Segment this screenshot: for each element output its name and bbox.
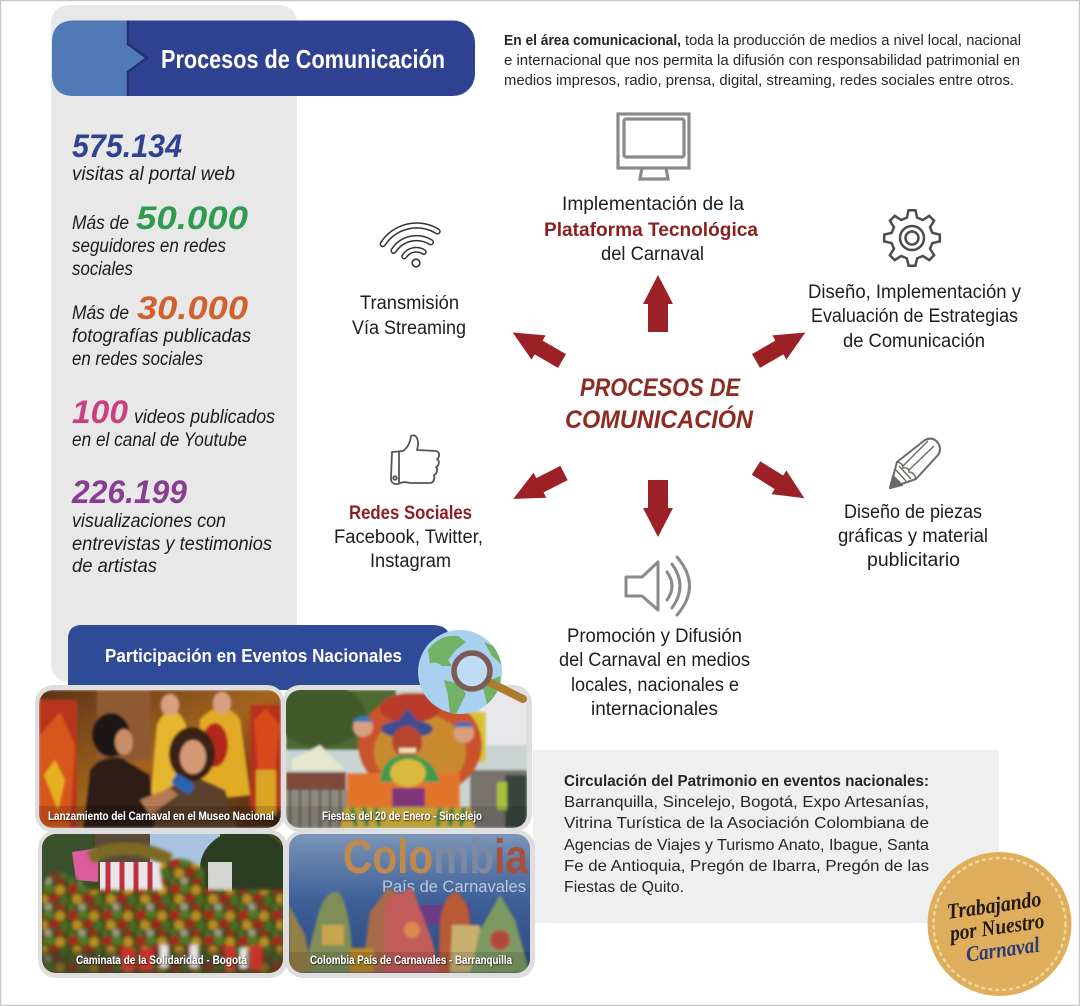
text: piezas gráficas: Diseño de piezas <box>844 502 982 523</box>
heading: Procesos de Comunicación: Procesos de Comunicación <box>161 44 445 74</box>
text: promoción y difusión: del Carnaval en medios <box>559 650 750 671</box>
photo: barranquilla: País de Carnavales <box>382 877 526 896</box>
text: promoción y difusión: Promoción y Difusión <box>567 626 742 647</box>
arrow: down <box>643 480 673 537</box>
central title: COMUNICACIÓN <box>565 405 754 434</box>
stat: published photos: fotografías publicadas <box>72 326 251 347</box>
stat: social followers: Más de <box>72 213 129 234</box>
stat: interview views: de artistas <box>72 556 157 577</box>
text block: introduction: e internacional que nos permita la difusión con responsabilidad patrimonial en <box>504 53 1020 69</box>
stat: social followers: seguidores en redes <box>72 236 226 257</box>
heading: Participación en Eventos Nacionales: Participación en Eventos Nacionales <box>105 645 402 666</box>
text: promoción y difusión: internacionales <box>591 699 718 720</box>
text: plataforma tecnológica: del Carnaval <box>601 244 704 265</box>
badge: trabajando por nuestro carnaval: Trabajando <box>945 886 1043 924</box>
photo: bogotá <box>42 830 290 973</box>
stat: published photos: en redes sociales <box>72 349 203 370</box>
caption: barranquilla: Colombia País de Carnavales - Barranquilla <box>310 955 513 967</box>
icon: thumbs up <box>391 435 439 484</box>
text block: introduction: medios impresos, radio, prensa, digital, streaming, redes sociales entre otros. <box>504 73 1014 89</box>
panel: photo grid <box>35 683 535 978</box>
badge: trabajando por nuestro carnaval: por Nuestro <box>947 908 1046 946</box>
caption: bogotá: Caminata de la Solidaridad - Bogotá <box>76 955 248 967</box>
stat: youtube videos: en el canal de Youtube <box>72 430 247 451</box>
text: estrategias de comunicación: Evaluación de Estrategias <box>811 306 1018 327</box>
text: estrategias de comunicación <box>808 282 1021 352</box>
central title <box>565 374 754 434</box>
stat: interview views <box>71 474 272 577</box>
icon: globe with magnifying glass <box>418 630 523 714</box>
text: plataforma tecnológica: Implementación de la <box>562 194 744 215</box>
caption: sincelejo: Fiestas del 20 de Enero - Sincelejo <box>322 811 482 823</box>
stat: portal visits: visitas al portal web <box>72 164 235 185</box>
caption: museo nacional: Lanzamiento del Carnaval en el Museo Nacional <box>48 811 274 823</box>
stat: published photos <box>72 290 251 370</box>
text: transmisión: Transmisión <box>360 293 459 314</box>
stat: published photos: 30.000 <box>137 290 248 326</box>
text: plataforma tecnológica <box>544 194 758 265</box>
arrow: up <box>643 275 673 332</box>
panel: statistics sidebar <box>51 5 297 682</box>
panel: circulación del patrimonio: Agencias de Viajes y Turismo Anato, Ibague, Santa <box>564 837 929 854</box>
photo: barranquilla <box>289 831 530 973</box>
stat: youtube videos: 100 <box>72 394 128 430</box>
stat: interview views: visualizaciones con <box>72 511 226 532</box>
text: redes sociales <box>334 503 483 572</box>
text: promoción y difusión: locales, nacionales e <box>571 675 739 696</box>
photo: barranquilla: Colombia <box>343 831 528 884</box>
text: promoción y difusión <box>559 626 750 720</box>
photo: museo nacional <box>39 690 281 828</box>
stat: youtube videos: videos publicados <box>134 407 275 428</box>
photo: sincelejo <box>275 683 527 828</box>
stat: published photos: Más de <box>72 303 129 324</box>
text: redes sociales: Redes Sociales <box>349 503 472 524</box>
text: piezas gráficas <box>838 502 988 571</box>
icon: monitor <box>618 114 689 179</box>
panel: circulación del patrimonio: Vitrina Turística de la Asociación Colombiana de <box>564 815 929 832</box>
panel: circulación del patrimonio: Barranquilla, Sincelejo, Bogotá, Expo Artesanías, <box>564 794 929 811</box>
stat: social followers <box>72 200 248 280</box>
icon: speaker <box>626 557 690 615</box>
stat: youtube videos <box>72 394 275 451</box>
stat: interview views: entrevistas y testimonios <box>72 534 272 555</box>
icon: pencil <box>890 439 940 488</box>
text: transmisión: Vía Streaming <box>352 318 466 339</box>
panel: circulación del patrimonio <box>533 750 999 923</box>
badge: trabajando por nuestro carnaval: Carnaval <box>964 932 1042 967</box>
heading: Procesos de Comunicación <box>52 20 475 96</box>
arrow: up left <box>506 320 569 373</box>
stat: interview views: 226.199 <box>71 474 187 510</box>
panel: circulación del patrimonio: Circulación del Patrimonio en eventos nacionales: <box>564 773 929 790</box>
text block: introduction <box>504 33 1021 89</box>
stat: portal visits: 575.134 <box>72 128 182 164</box>
text: plataforma tecnológica: Plataforma Tecnológica <box>544 220 758 241</box>
central title: PROCESOS DE <box>580 374 741 402</box>
text: piezas gráficas: gráficas y material <box>838 526 988 547</box>
text: estrategias de comunicación: Diseño, Implementación y <box>808 282 1021 303</box>
text: estrategias de comunicación: de Comunicación <box>843 331 985 352</box>
stat: social followers: 50.000 <box>136 200 248 236</box>
stat: portal visits <box>72 128 235 185</box>
panel: circulación del patrimonio: Fiestas de Quito. <box>564 879 684 896</box>
text block: introduction: toda la producción de medios a nivel local, nacional <box>685 33 1021 49</box>
text: redes sociales: Facebook, Twitter, <box>334 527 483 548</box>
text: piezas gráficas: publicitario <box>867 550 960 571</box>
icon: wifi <box>380 220 444 273</box>
badge: trabajando por nuestro carnaval <box>928 852 1072 996</box>
arrow: down left <box>507 461 570 511</box>
arrow: up right <box>749 320 812 373</box>
text: redes sociales: Instagram <box>370 551 451 572</box>
icon: gear <box>884 210 940 266</box>
text block: introduction: En el área comunicacional, <box>504 33 681 49</box>
text: transmisión <box>352 293 466 339</box>
panel: circulación del patrimonio: Fe de Antioquia, Pregón de Ibarra, Pregón de las <box>564 858 929 875</box>
stat: social followers: sociales <box>72 259 133 280</box>
arrow: down right <box>749 456 812 510</box>
heading: Participación en Eventos Nacionales <box>68 625 450 690</box>
